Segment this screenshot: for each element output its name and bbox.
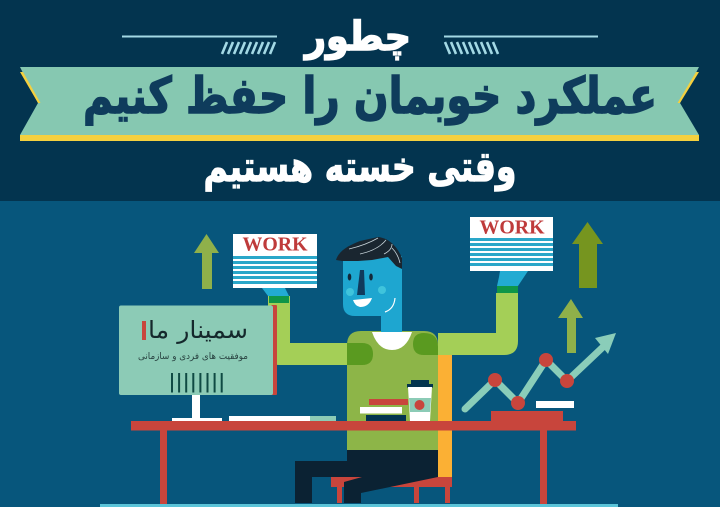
heading: top line: چطور — [303, 14, 411, 60]
stack of books — [360, 399, 408, 422]
arrow: left up arrow — [194, 234, 219, 289]
bottom strip — [100, 504, 618, 507]
trousers — [295, 450, 438, 503]
person: head — [336, 237, 402, 316]
work paper: right: WORK — [480, 216, 545, 238]
chair — [331, 355, 452, 503]
person: neck and collar — [372, 312, 412, 350]
person: right arm — [413, 271, 528, 355]
torso — [347, 331, 438, 450]
ribbon banner — [20, 67, 699, 141]
desk items: chart base and note — [491, 401, 574, 422]
person: left arm — [262, 288, 373, 365]
arrow: large right up arrow — [572, 222, 603, 288]
keyboard — [229, 416, 336, 422]
desk — [131, 421, 576, 504]
monitor — [119, 305, 277, 422]
logo: tagline: موفقیت های فردی و سازمانی — [138, 352, 248, 362]
work paper: left — [233, 234, 317, 288]
work paper: right — [470, 216, 553, 271]
logo: pen mark — [142, 321, 146, 340]
monitor barcode — [172, 373, 222, 392]
arrow: small right up arrow — [558, 299, 583, 353]
header band — [0, 0, 720, 201]
heading: bottom line: وقتی خسته هستیم — [204, 142, 516, 192]
logo: wordmark: سمینار ما — [148, 316, 248, 344]
line chart with arrow — [465, 333, 616, 410]
work paper: left: WORK — [242, 234, 308, 256]
coffee cup — [407, 380, 433, 421]
